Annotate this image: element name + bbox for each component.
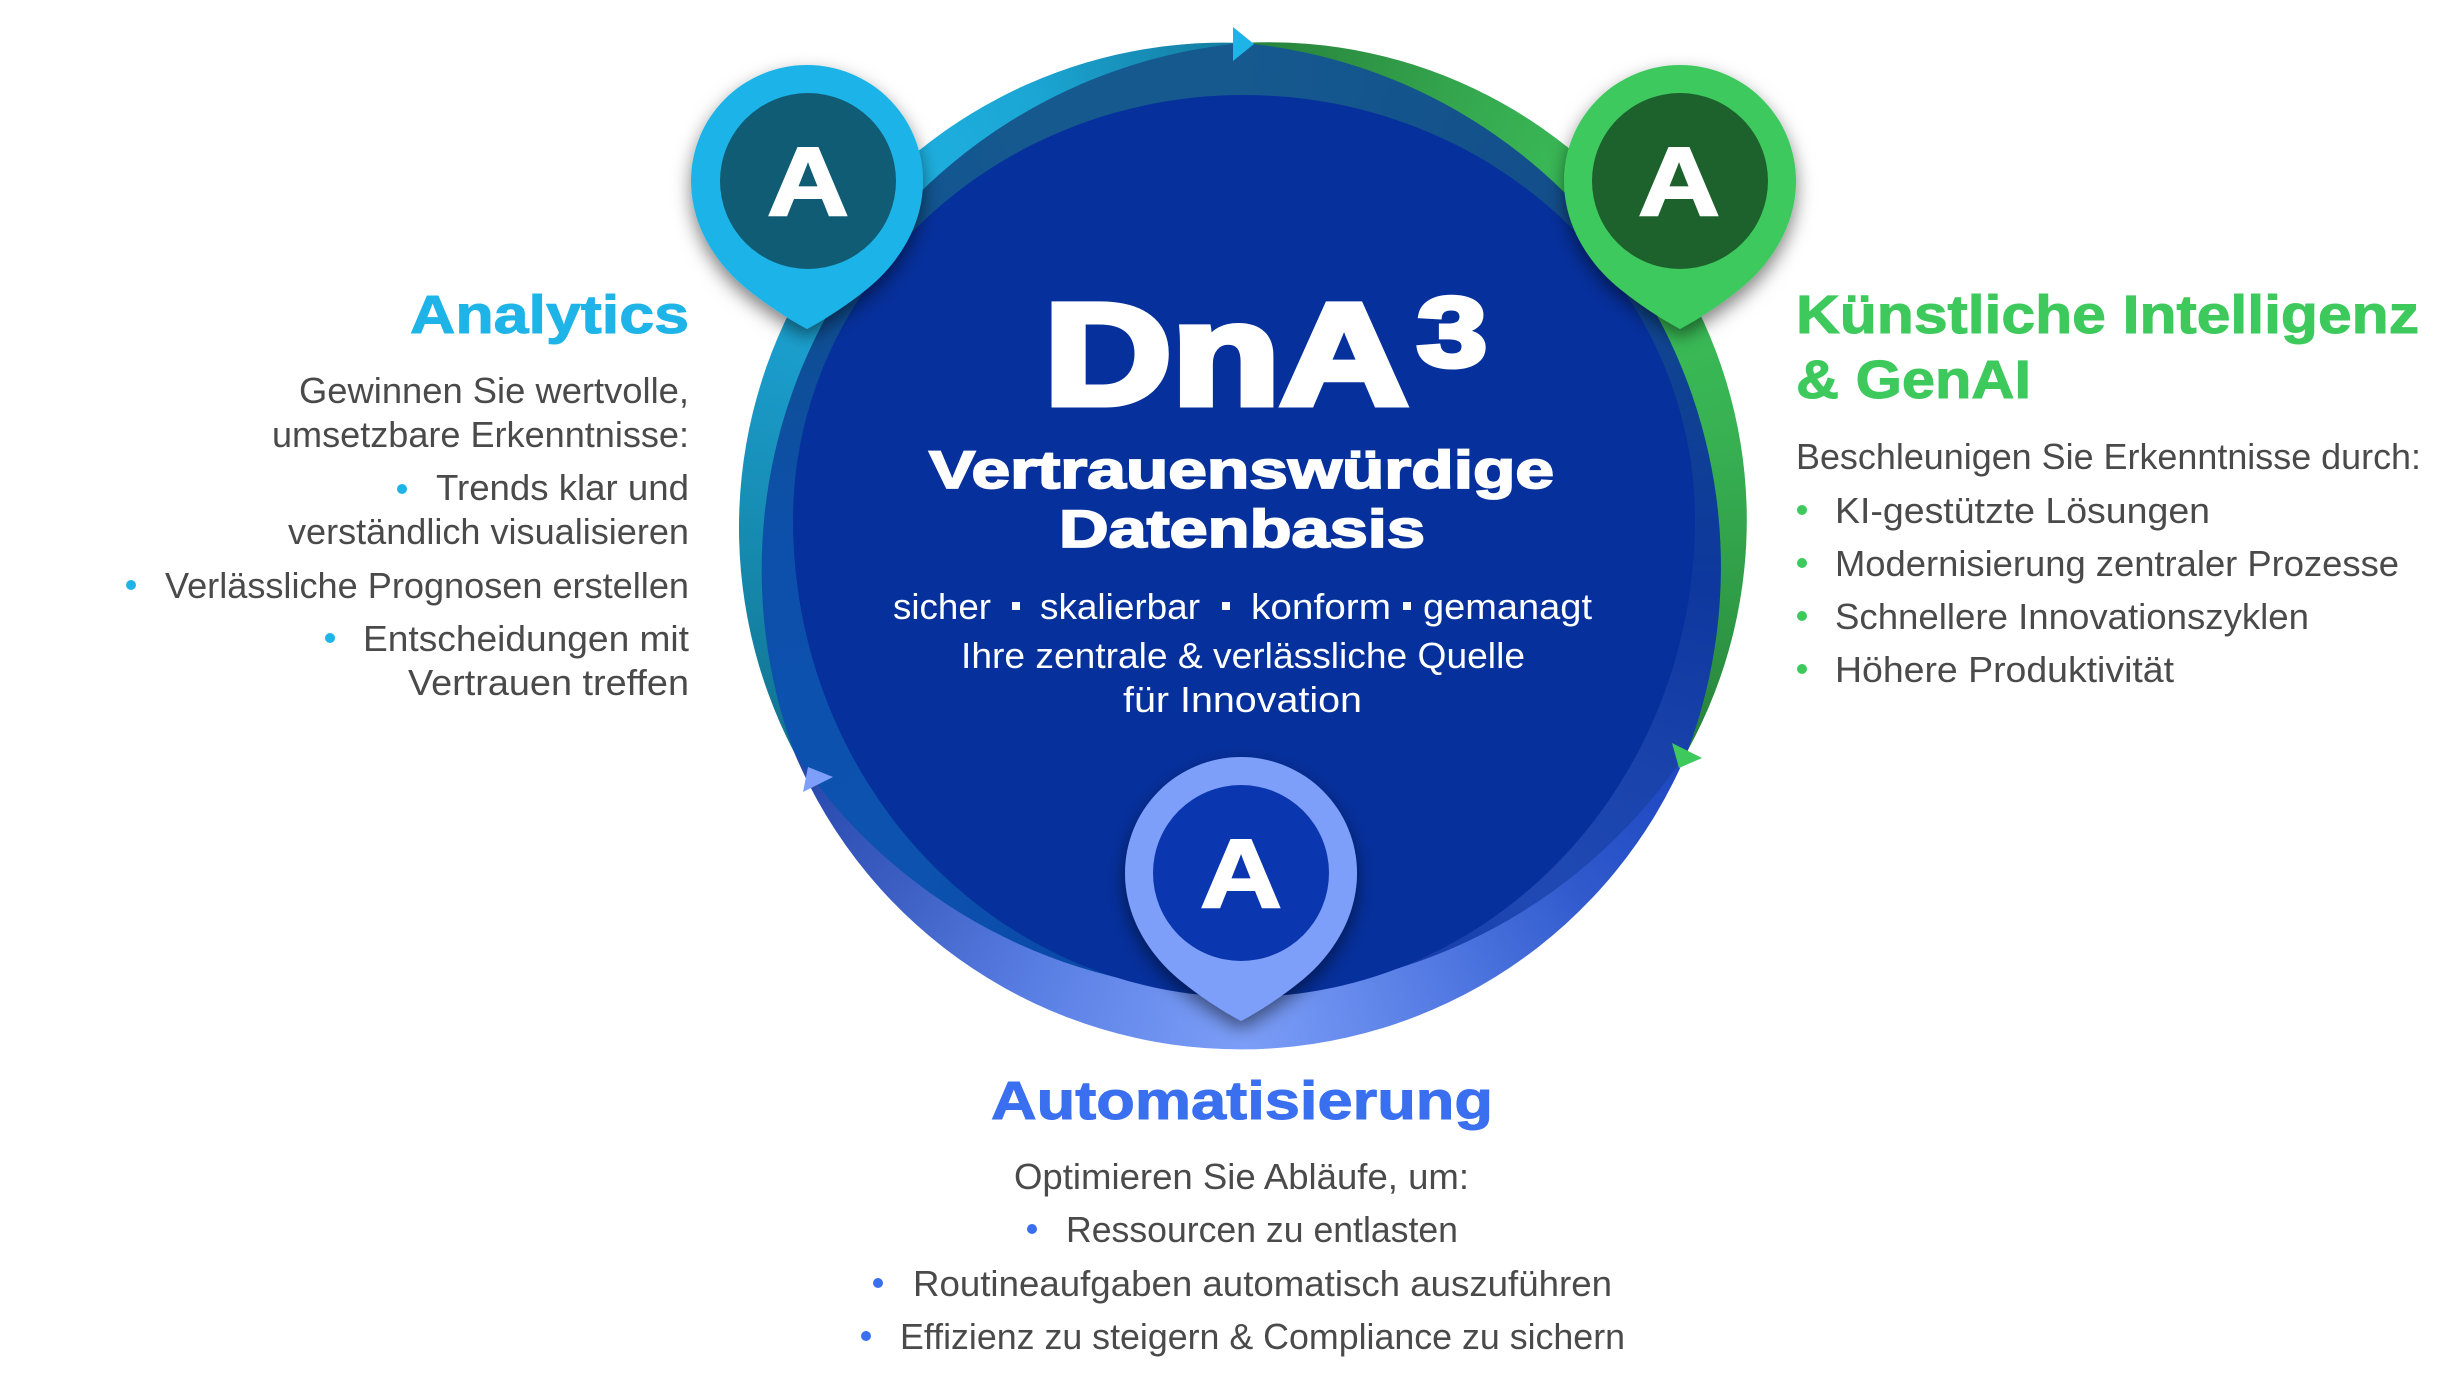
center attributes: konform (1251, 586, 1391, 627)
heading: Künstliche Intelligenz & GenAI: & GenAI (1796, 350, 2031, 410)
pin: automation (1125, 757, 1357, 1021)
arrow: cyan (1233, 27, 1254, 61)
text block: automation (861, 1156, 1625, 1357)
inner navy disc (793, 95, 1695, 997)
center description: für Innovation (1123, 679, 1362, 720)
heading: Künstliche Intelligenz & GenAI: Künstliche Intelligenz (1796, 285, 2419, 345)
title: DnA3: DnA (1044, 274, 1408, 435)
title: DnA3: 3 (1417, 277, 1487, 387)
pin: artificial intelligence (1564, 65, 1796, 329)
text block: analytics: Vertrauen treffen (408, 662, 689, 703)
text block: automation: Optimieren Sie Abläufe, um: (1014, 1156, 1469, 1197)
heading: Künstliche Intelligenz & GenAI (1796, 285, 2419, 410)
text block: analytics: Gewinnen Sie wertvolle, (299, 370, 689, 411)
text block: analytics: umsetzbare Erkenntnisse: (272, 414, 689, 455)
center attributes (893, 586, 1592, 627)
center description (961, 635, 1525, 720)
text block: analytics: Verlässliche Prognosen erstellen (165, 565, 689, 606)
text block: analytics (126, 370, 689, 703)
subtitle: Datenbasis (1059, 500, 1425, 559)
center attributes: skalierbar (1040, 586, 1200, 627)
center attributes: sicher (893, 586, 991, 627)
text block: artificial intelligence: Modernisierung zentraler Prozesse (1835, 543, 2399, 584)
subtitle: Vertrauenswürdige (929, 441, 1554, 500)
text block: artificial intelligence (1796, 436, 2421, 690)
pin: analytics: A (767, 127, 849, 236)
text block: artificial intelligence: Schnellere Innovationszyklen (1835, 596, 2309, 637)
text block: analytics: Entscheidungen mit (363, 618, 689, 659)
text block: artificial intelligence: KI-gestützte Lösungen (1835, 490, 2210, 531)
pin: analytics (691, 65, 923, 329)
text block: automation: Effizienz zu steigern & Compliance zu sichern (900, 1316, 1625, 1357)
text block: automation: Routineaufgaben automatisch auszuführen (913, 1263, 1612, 1304)
middle ring band (762, 44, 1721, 978)
text block: analytics: Trends klar und (436, 467, 689, 508)
heading: Automatisierung: Automatisierung (991, 1071, 1493, 1131)
arrow: green (1672, 743, 1702, 768)
text block: artificial intelligence: Höhere Produktivität (1835, 649, 2174, 690)
center description: Ihre zentrale & verlässliche Quelle (961, 635, 1525, 676)
pin: automation: A (1200, 819, 1282, 928)
title: DnA3 (1044, 274, 1487, 435)
pin: artificial intelligence: A (1638, 127, 1720, 236)
heading: Analytics: Analytics (410, 285, 689, 345)
arrow: periwinkle (803, 767, 833, 792)
text block: analytics: verständlich visualisieren (288, 511, 689, 552)
text block: artificial intelligence: Beschleunigen Sie Erkenntnisse durch: (1796, 436, 2421, 477)
center attributes: gemanagt (1423, 586, 1592, 627)
text block: automation: Ressourcen zu entlasten (1066, 1209, 1458, 1250)
outer ring: cyan, green and blue arcs (739, 42, 1747, 1050)
subtitle (929, 441, 1554, 559)
central circle with gradient rings (739, 42, 1747, 1050)
